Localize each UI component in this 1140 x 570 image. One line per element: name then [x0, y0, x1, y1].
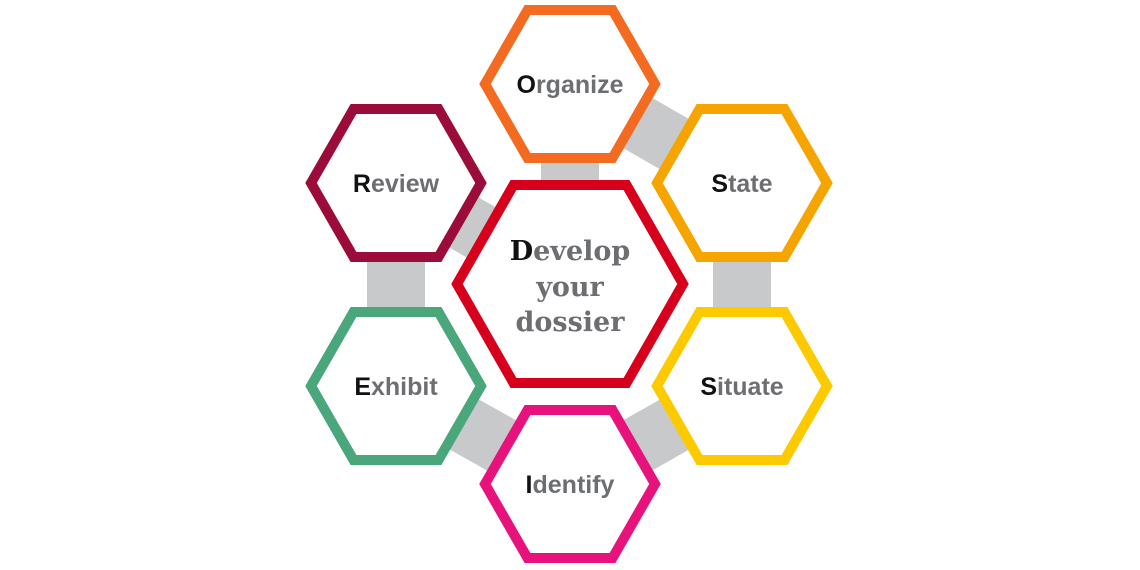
hexagon: State: [657, 109, 827, 257]
hexagon: Identify: Identify: [526, 471, 615, 499]
center hexagon: Develop your dossier: your: [535, 272, 605, 303]
hexagon: Situate: [657, 312, 827, 460]
hexagon: Exhibit: [311, 312, 481, 460]
hexagon: Organize: [485, 10, 655, 158]
hexagon: Situate: Situate: [700, 373, 784, 401]
center hexagon: Develop your dossier: Develop: [510, 236, 630, 267]
hexagon: Review: Review: [353, 170, 440, 198]
hexagon: State: State: [711, 170, 773, 198]
hexagon: Organize: Organize: [517, 71, 624, 99]
center hexagon: Develop your dossier: dossier: [516, 307, 625, 338]
hexagon: Exhibit: Exhibit: [354, 373, 438, 401]
hexagon: Review: [311, 109, 481, 257]
hexagon: Identify: [485, 410, 655, 558]
connectors: [396, 84, 742, 484]
center hexagon: Develop your dossier: [457, 185, 683, 383]
